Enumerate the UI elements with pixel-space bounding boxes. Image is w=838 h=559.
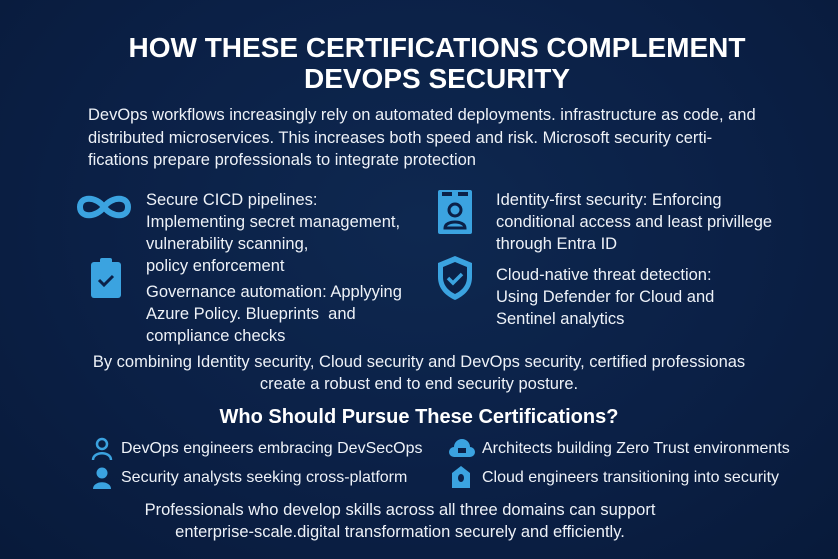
text: identity-first [496,191,772,253]
text: architects: Architects building Zero Trust environments [482,440,790,457]
text: governance: Governance automation: Applyying [146,283,402,301]
text: governance [146,283,402,345]
closing text: enterprise-scale.digital transformation securely and efficiently. [175,523,625,541]
text: CICD pipelines: vulnerability scanning, [146,235,308,253]
title: DEVOPS SECURITY [304,63,570,94]
text: security analysts: Security analysts seeking cross-platform [121,469,407,486]
closing text: Professionals who develop skills across all three domains can support [145,501,655,519]
summary: By combining Identity security, Cloud security and DevOps security, certified professionas [93,353,745,371]
text: identity-first: through Entra ID [496,235,617,253]
closing text [145,501,656,541]
icon: home shield [452,466,470,488]
text: CICD pipelines: policy enforcement [146,257,284,275]
icon: clipboard [91,258,121,298]
heading: who should pursue: Who Should Pursue These Certifications? [220,406,618,428]
text: identity-first: conditional access and least privillege [496,213,772,231]
summary: create a robust end to end security posture. [260,375,578,393]
icon: infinity [77,196,131,218]
icon: person outline [92,438,112,460]
text: threat detection: Cloud-native threat detection: [496,266,712,284]
intro text: fications prepare professionals to integrate protection [88,151,476,169]
text: threat detection [496,266,714,328]
icon: identity badge [438,190,472,234]
text: cloud engineers: Cloud engineers transitioning into security [482,469,779,486]
icon: shield [438,256,472,300]
text: threat detection: Sentinel analytics [496,310,624,328]
text: CICD pipelines: Implementing secret management, [146,213,400,231]
text: governance: compliance checks [146,327,285,345]
text: CICD pipelines: Secure CICD pipelines: [146,191,318,209]
title [128,32,746,94]
text: threat detection: Using Defender for Cloud and [496,288,714,306]
audience list [92,438,790,489]
summary [93,353,745,393]
intro text: DevOps workflows increasingly rely on automated deployments. infrastructure as code, and [88,106,756,124]
icon: cloud [449,439,475,457]
icon: person filled [93,468,111,489]
text: devops engineers: DevOps engineers embracing DevSecOps [121,440,422,457]
text: governance: Azure Policy. Blueprints and [146,305,356,323]
title: HOW THESE CERTIFICATIONS COMPLEMENT [128,32,746,63]
intro text [88,106,756,169]
text: CICD pipelines [146,191,400,275]
intro text: distributed microservices. This increases both speed and risk. Microsoft security certi- [88,128,712,146]
text: identity-first: Identity-first security: Enforcing [496,191,722,209]
